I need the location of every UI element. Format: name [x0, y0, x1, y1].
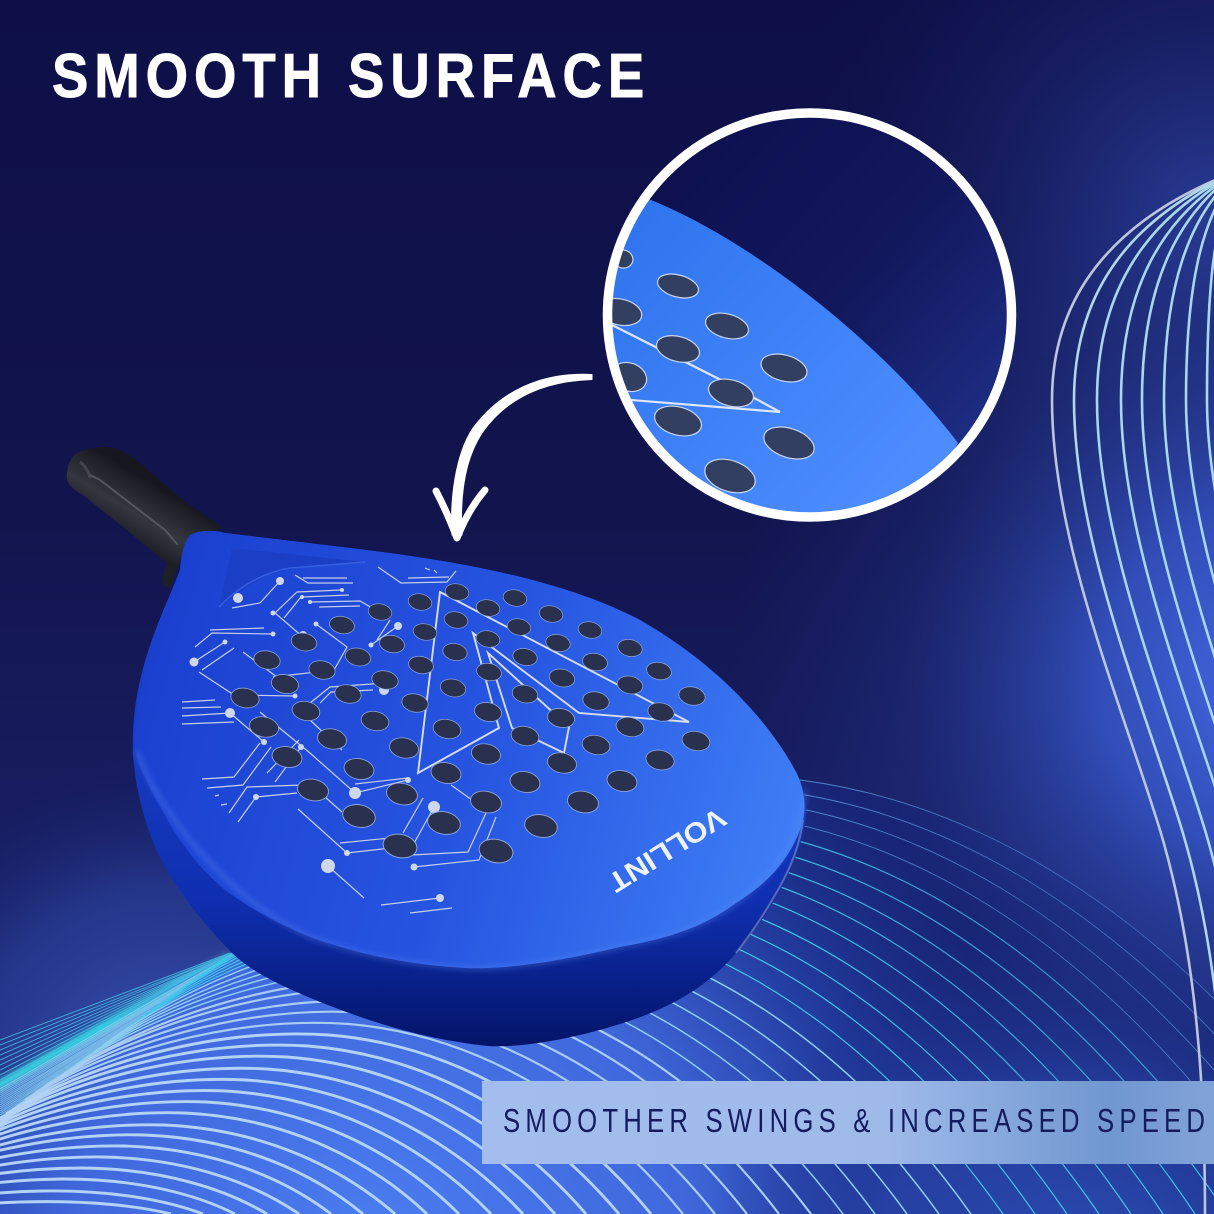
magnified detail	[612, 140, 1007, 512]
rim highlight	[136, 750, 805, 968]
paddle	[67, 447, 806, 1046]
icon: curved arrow	[436, 374, 592, 538]
handle	[67, 447, 223, 588]
paddle body side	[133, 531, 806, 1046]
magnifier circle	[590, 100, 1020, 540]
paper plane logo	[418, 592, 689, 773]
wave pattern: right ribbon lines	[1052, 170, 1214, 1214]
inset panel highlight	[219, 562, 365, 607]
wave pattern: bottom concentric lines	[0, 754, 1214, 1214]
circuit dots	[190, 577, 444, 902]
throat	[219, 548, 365, 607]
right side blue glow	[690, 140, 1214, 1214]
brand logo: VOLLINT	[603, 802, 731, 898]
banner	[482, 1081, 1214, 1164]
paddle face	[134, 531, 804, 968]
paddle side edge sheen	[736, 820, 803, 953]
perforation holes	[229, 582, 712, 866]
circuit pattern	[182, 567, 496, 913]
ridge glow	[0, 955, 230, 1090]
banner: SMOOTHER SWINGS & INCREASED SPEED	[503, 1103, 1205, 1140]
title: SMOOTH SURFACE	[52, 42, 644, 111]
